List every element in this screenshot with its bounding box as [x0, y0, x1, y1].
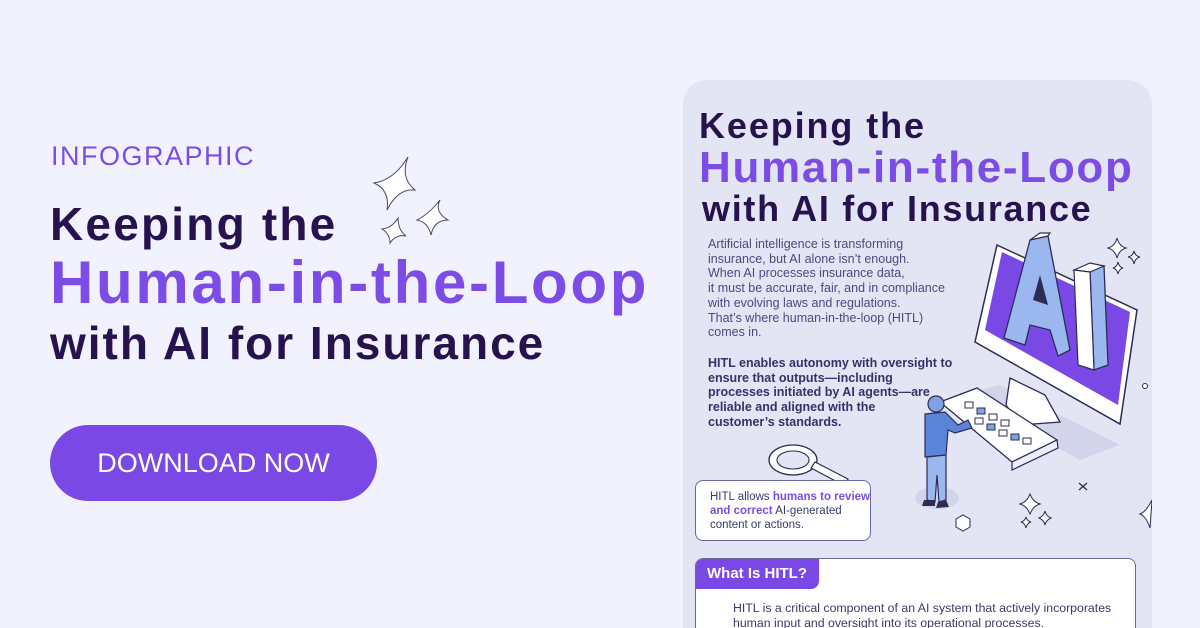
intro text: When AI processes insurance data,: [708, 266, 905, 280]
main title: Keeping the: [50, 198, 337, 250]
bold paragraph: reliable and aligned with the: [708, 400, 875, 414]
main title: with AI for Insurance: [50, 317, 545, 369]
stand: [1006, 378, 1060, 425]
label: INFOGRAPHIC: INFOGRAPHIC: [51, 141, 255, 171]
person: [915, 487, 959, 509]
icon: sparkles: [372, 156, 450, 244]
intro text: [708, 237, 945, 339]
definition text: [733, 601, 1111, 628]
shadow: [960, 385, 1120, 460]
letter I: [1090, 266, 1108, 370]
bold paragraph: ensure that outputs—including: [708, 371, 893, 385]
panel: infographic preview card: [683, 80, 1152, 628]
intro text: it must be accurate, fair, and in compliance: [708, 281, 945, 295]
callout: humans review: content or actions.: [710, 519, 804, 531]
card title: with AI for Insurance: [702, 188, 1092, 229]
bold paragraph: customer’s standards.: [708, 415, 841, 429]
card title: Keeping the: [699, 105, 926, 146]
intro text: Artificial intelligence is transforming: [708, 237, 903, 251]
bold paragraph: processes initiated by AI agents—are: [708, 385, 930, 399]
sparkles and decorations: [956, 238, 1152, 531]
definition text: HITL is a critical component of an AI system that actively incorporates: [733, 601, 1111, 615]
card title: Human-in-the-Loop: [699, 143, 1134, 192]
letter A: [1004, 236, 1070, 356]
tab heading: [695, 558, 819, 589]
intro text: comes in.: [708, 325, 762, 339]
intro text: That’s where human-in-the-loop (HITL): [708, 311, 923, 325]
intro text: insurance, but AI alone isn’t enough.: [708, 252, 910, 266]
callout: humans review: [695, 480, 871, 541]
callout: humans review: HITL allows humans to review: [710, 491, 870, 503]
icon: magnifier: [768, 444, 849, 480]
main title: Human-in-the-Loop: [50, 249, 649, 316]
panel: What Is HITL: [695, 558, 1136, 628]
monitor frame: [975, 245, 1137, 424]
button: download now: [50, 425, 377, 501]
button: download now: DOWNLOAD NOW: [97, 448, 330, 478]
callout: humans review: and correct AI-generated: [710, 505, 842, 517]
card title: [699, 105, 1134, 229]
bold paragraph: [708, 356, 952, 429]
main title: [50, 198, 649, 369]
bold paragraph: HITL enables autonomy with oversight to: [708, 356, 952, 370]
illustration: monitor with AI, person and keyboard: [915, 232, 1152, 532]
tab heading: What Is HITL?: [707, 565, 807, 582]
keyboard: [940, 388, 1057, 462]
intro text: with evolving laws and regulations.: [708, 296, 900, 310]
